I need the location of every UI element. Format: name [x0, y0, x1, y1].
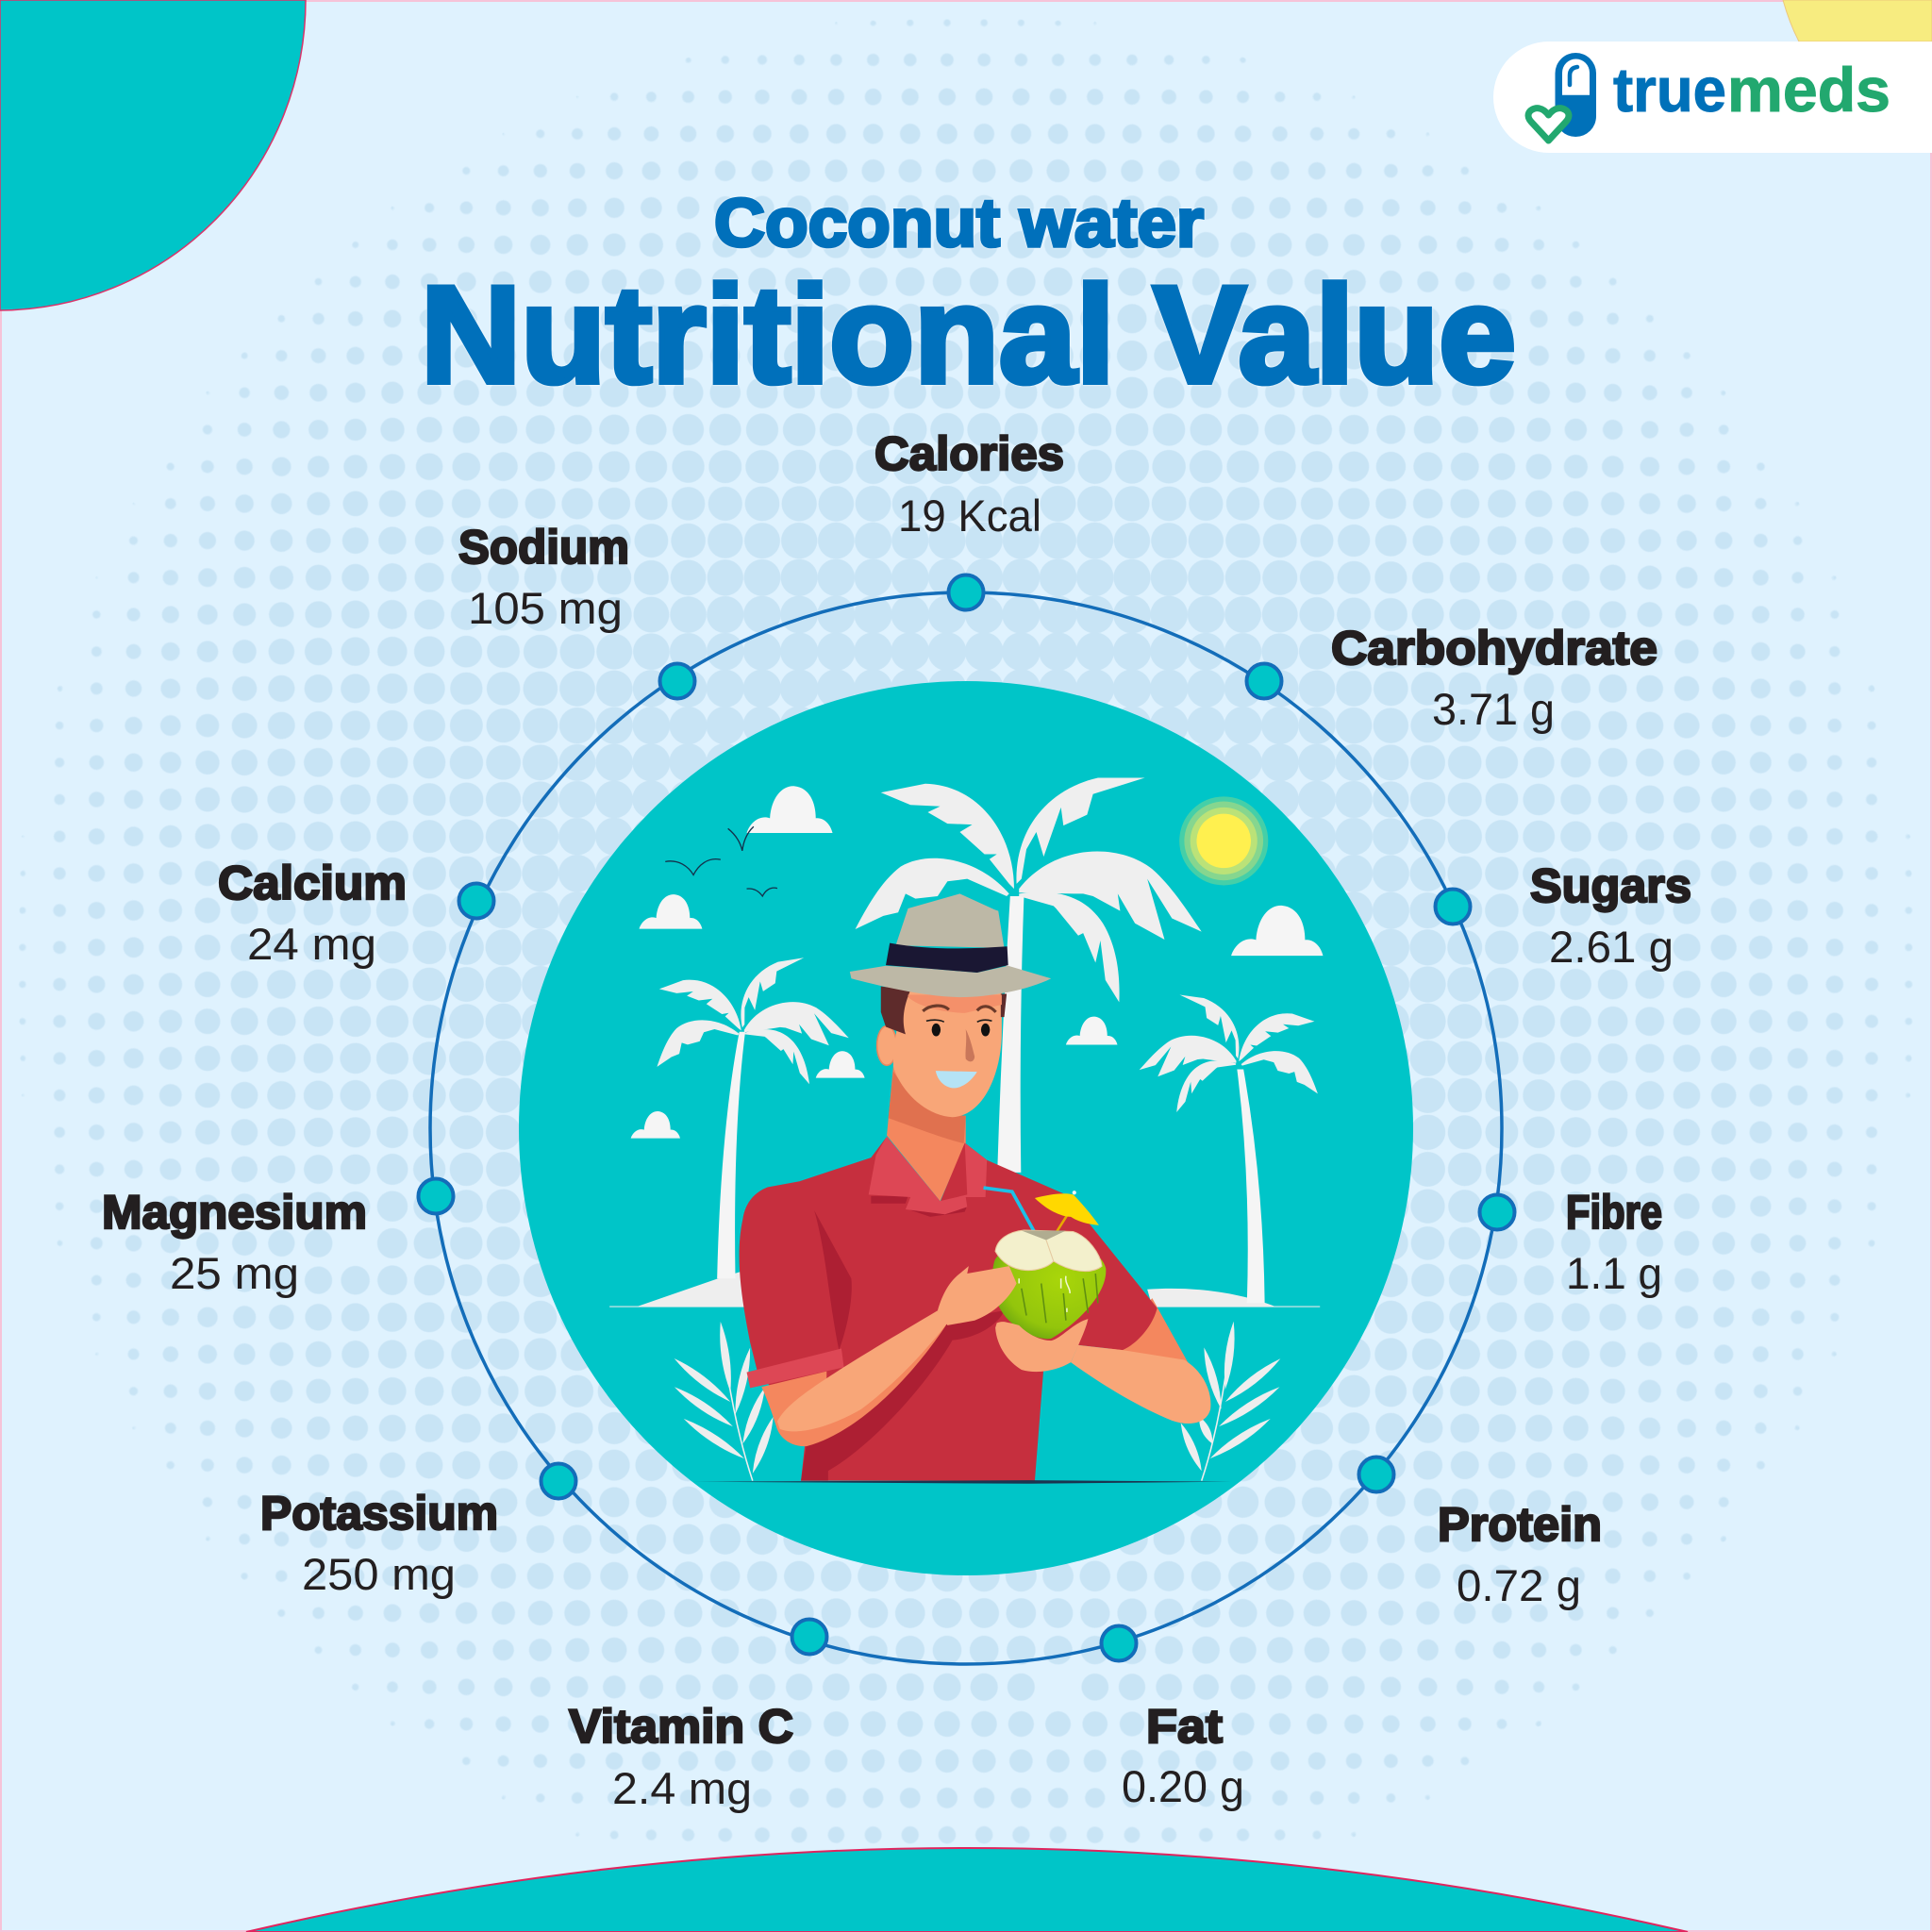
- label: Protein: 0.72 g: [1457, 1560, 1581, 1610]
- label: Fat: 0.20 g: [1122, 1761, 1244, 1811]
- neck shadow: [889, 1072, 966, 1143]
- label: Protein: Protein: [1438, 1498, 1602, 1551]
- label: Sugars: 2.61 g: [1549, 922, 1674, 972]
- heading: Nutritional Value: Nutritional Value: [421, 258, 1516, 411]
- label: Potassium: [260, 1487, 498, 1599]
- coconut: [992, 1230, 1106, 1339]
- label: Magnesium: 25 mg: [170, 1248, 299, 1298]
- body shadow: [801, 1310, 1005, 1481]
- corner shape: teal quarter circle: [0, 0, 306, 310]
- label: Calcium: 24 mg: [247, 919, 376, 969]
- label: Sugars: [1530, 859, 1691, 972]
- bottom hand: [995, 1319, 1088, 1372]
- straw: [984, 1188, 1038, 1238]
- shirt: [740, 1138, 1158, 1481]
- subtitle: Coconut water: Coconut water: [714, 186, 1204, 261]
- label: Carbohydrate: Carbohydrate: [1331, 622, 1657, 675]
- logo: truemeds: true: [1613, 55, 1726, 125]
- label: Potassium: 250 mg: [302, 1549, 456, 1599]
- label: Fibre: Fibre: [1566, 1186, 1662, 1239]
- label: Vitamin C: 2.4 mg: [612, 1763, 752, 1813]
- label: Calories: Calories: [874, 427, 1064, 480]
- bottom teal arc: [246, 1848, 1688, 1932]
- logo: truemeds: meds: [1727, 55, 1890, 125]
- sun: [1179, 796, 1268, 885]
- top hand: [938, 1266, 1017, 1325]
- label: Magnesium: [102, 1186, 367, 1298]
- corner shape: yellow: [1783, 0, 1932, 42]
- label: Protein: [1438, 1498, 1602, 1610]
- label: Sodium: 105 mg: [468, 583, 623, 633]
- illustration: man with coconut on beach: [609, 777, 1329, 1484]
- ground line: [693, 1480, 1231, 1484]
- gaps in dot pattern: [334, 1223, 1079, 1708]
- nutrient nodes: [419, 575, 1515, 1660]
- label: Carbohydrate: [1331, 622, 1657, 734]
- big palm: [856, 777, 1202, 1173]
- right arm shade: [1108, 1298, 1190, 1365]
- label: Magnesium: Magnesium: [102, 1186, 367, 1239]
- orbit ring: [430, 592, 1502, 1664]
- face: [877, 987, 1007, 1117]
- label: Sodium: [458, 521, 629, 633]
- label: Calories: 19 Kcal: [898, 491, 1041, 541]
- title: [421, 186, 1516, 411]
- right leaves: [1177, 1321, 1283, 1481]
- sleeve cuff: [747, 1349, 844, 1388]
- logo: truemeds: [1493, 42, 1932, 153]
- label: Calories: [874, 427, 1064, 541]
- left forearm: [777, 1310, 947, 1431]
- label: Calcium: Calcium: [218, 857, 407, 909]
- clouds: [631, 786, 1323, 1139]
- label: Fat: [1122, 1700, 1244, 1811]
- label: Vitamin C: Vitamin C: [569, 1700, 793, 1753]
- hat: [850, 893, 1051, 997]
- left leaves: [672, 1321, 777, 1481]
- cocktail umbrella: [1035, 1191, 1099, 1237]
- right forearm: [1071, 1345, 1210, 1424]
- left palm: [643, 953, 855, 1278]
- label: Sodium: Sodium: [458, 521, 629, 574]
- label: Vitamin C: [569, 1700, 793, 1813]
- label: Fat: Fat: [1146, 1700, 1223, 1753]
- label: Fibre: 1.1 g: [1566, 1248, 1662, 1298]
- collar: [869, 1137, 987, 1217]
- left arm shade: [761, 1323, 947, 1446]
- label: Potassium: Potassium: [260, 1487, 498, 1540]
- horizon and islands: [609, 1271, 1320, 1307]
- neck: [887, 1066, 966, 1201]
- label: Calcium: [218, 857, 407, 969]
- label: Carbohydrate: 3.71 g: [1432, 684, 1555, 734]
- birds: [665, 826, 777, 896]
- right palm: [1134, 991, 1329, 1303]
- sleeve shadow: [814, 1210, 852, 1350]
- central teal circle: [519, 681, 1413, 1575]
- label: Fibre: [1566, 1186, 1662, 1298]
- label: Sugars: Sugars: [1530, 859, 1691, 912]
